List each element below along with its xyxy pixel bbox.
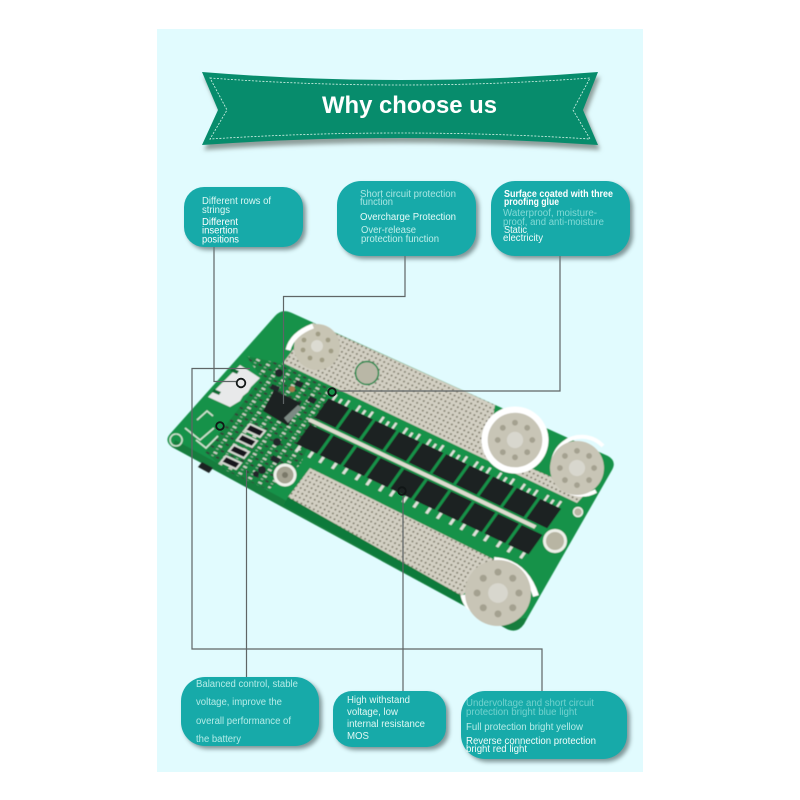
- callout: indicator lights: [461, 691, 630, 762]
- callout: different rows: insertion: [202, 226, 238, 236]
- circuit board photo: [167, 311, 614, 631]
- small dark components: [253, 369, 317, 477]
- callout: different rows: Different: [202, 217, 238, 228]
- green test pad: [356, 362, 378, 384]
- callout: indicator lights: bright red light: [466, 744, 527, 755]
- callout: MOS: voltage, low: [347, 707, 399, 718]
- callout: different rows: [184, 187, 306, 250]
- callout: indicator lights: Reverse connection protection: [466, 736, 596, 747]
- callout: protection functions: Overcharge Protection: [360, 212, 456, 223]
- title: Why choose us: [322, 92, 497, 119]
- mosfet rows: [289, 391, 565, 560]
- round pad hole left: [274, 464, 296, 486]
- connector end rings: [216, 379, 406, 495]
- round pad bottom: [463, 560, 536, 626]
- callout: MOS: internal resistance: [347, 719, 425, 730]
- callout: different rows: strings: [202, 205, 230, 216]
- resistor row: [221, 424, 265, 469]
- amber component: [289, 386, 295, 392]
- callout: surface coating: Surface coated with three: [504, 189, 613, 200]
- control circuit area: [205, 356, 330, 490]
- callout: protection functions: protection function: [361, 234, 439, 245]
- board body: [167, 311, 614, 631]
- panel: light cyan background: [157, 29, 643, 772]
- upper silver busbar: [283, 323, 587, 503]
- balance traces: [170, 411, 218, 448]
- callout: balanced control: Balanced control, stable: [196, 679, 298, 690]
- callout: protection functions: Short circuit protection: [360, 189, 456, 200]
- callout: surface coating: Static: [504, 225, 527, 236]
- callout: surface coating: proofing glue: [504, 197, 559, 208]
- callout: surface coating: [491, 181, 633, 259]
- callout: different rows: Different rows of: [202, 196, 271, 207]
- callout: balanced control: [181, 677, 322, 749]
- callout: surface coating: Waterproof, moisture-: [503, 208, 597, 219]
- callout: MOS: [333, 691, 449, 750]
- callout: protection functions: [337, 181, 479, 259]
- callout: indicator lights: protection bright blue light: [466, 707, 577, 718]
- callout: balanced control: voltage, improve the: [196, 697, 282, 708]
- lower silver busbar: [288, 468, 495, 596]
- white battery connector: [208, 365, 260, 407]
- callout: different rows: positions: [202, 234, 239, 246]
- callout: MOS: High withstand: [347, 695, 410, 706]
- banner: Why choose us: [202, 72, 600, 150]
- callout: balanced control: overall performance of: [196, 716, 291, 727]
- callout: protection functions: function: [360, 197, 393, 208]
- callout: indicator lights: Full protection bright yellow: [466, 722, 584, 733]
- callout: surface coating: electricity: [503, 233, 543, 244]
- callout: protection functions: Over-release: [361, 225, 416, 236]
- round pads right: [482, 406, 604, 495]
- callout: balanced control: the battery: [196, 734, 241, 745]
- top left pad: [288, 324, 340, 370]
- connector lines: [192, 247, 560, 691]
- small pad right: [543, 529, 567, 553]
- callout: indicator lights: Undervoltage and short circuit: [466, 698, 594, 709]
- control IC: [263, 390, 301, 426]
- callout: surface coating: proof, and anti-moisture: [503, 217, 604, 228]
- callout: MOS: MOS: [347, 731, 369, 742]
